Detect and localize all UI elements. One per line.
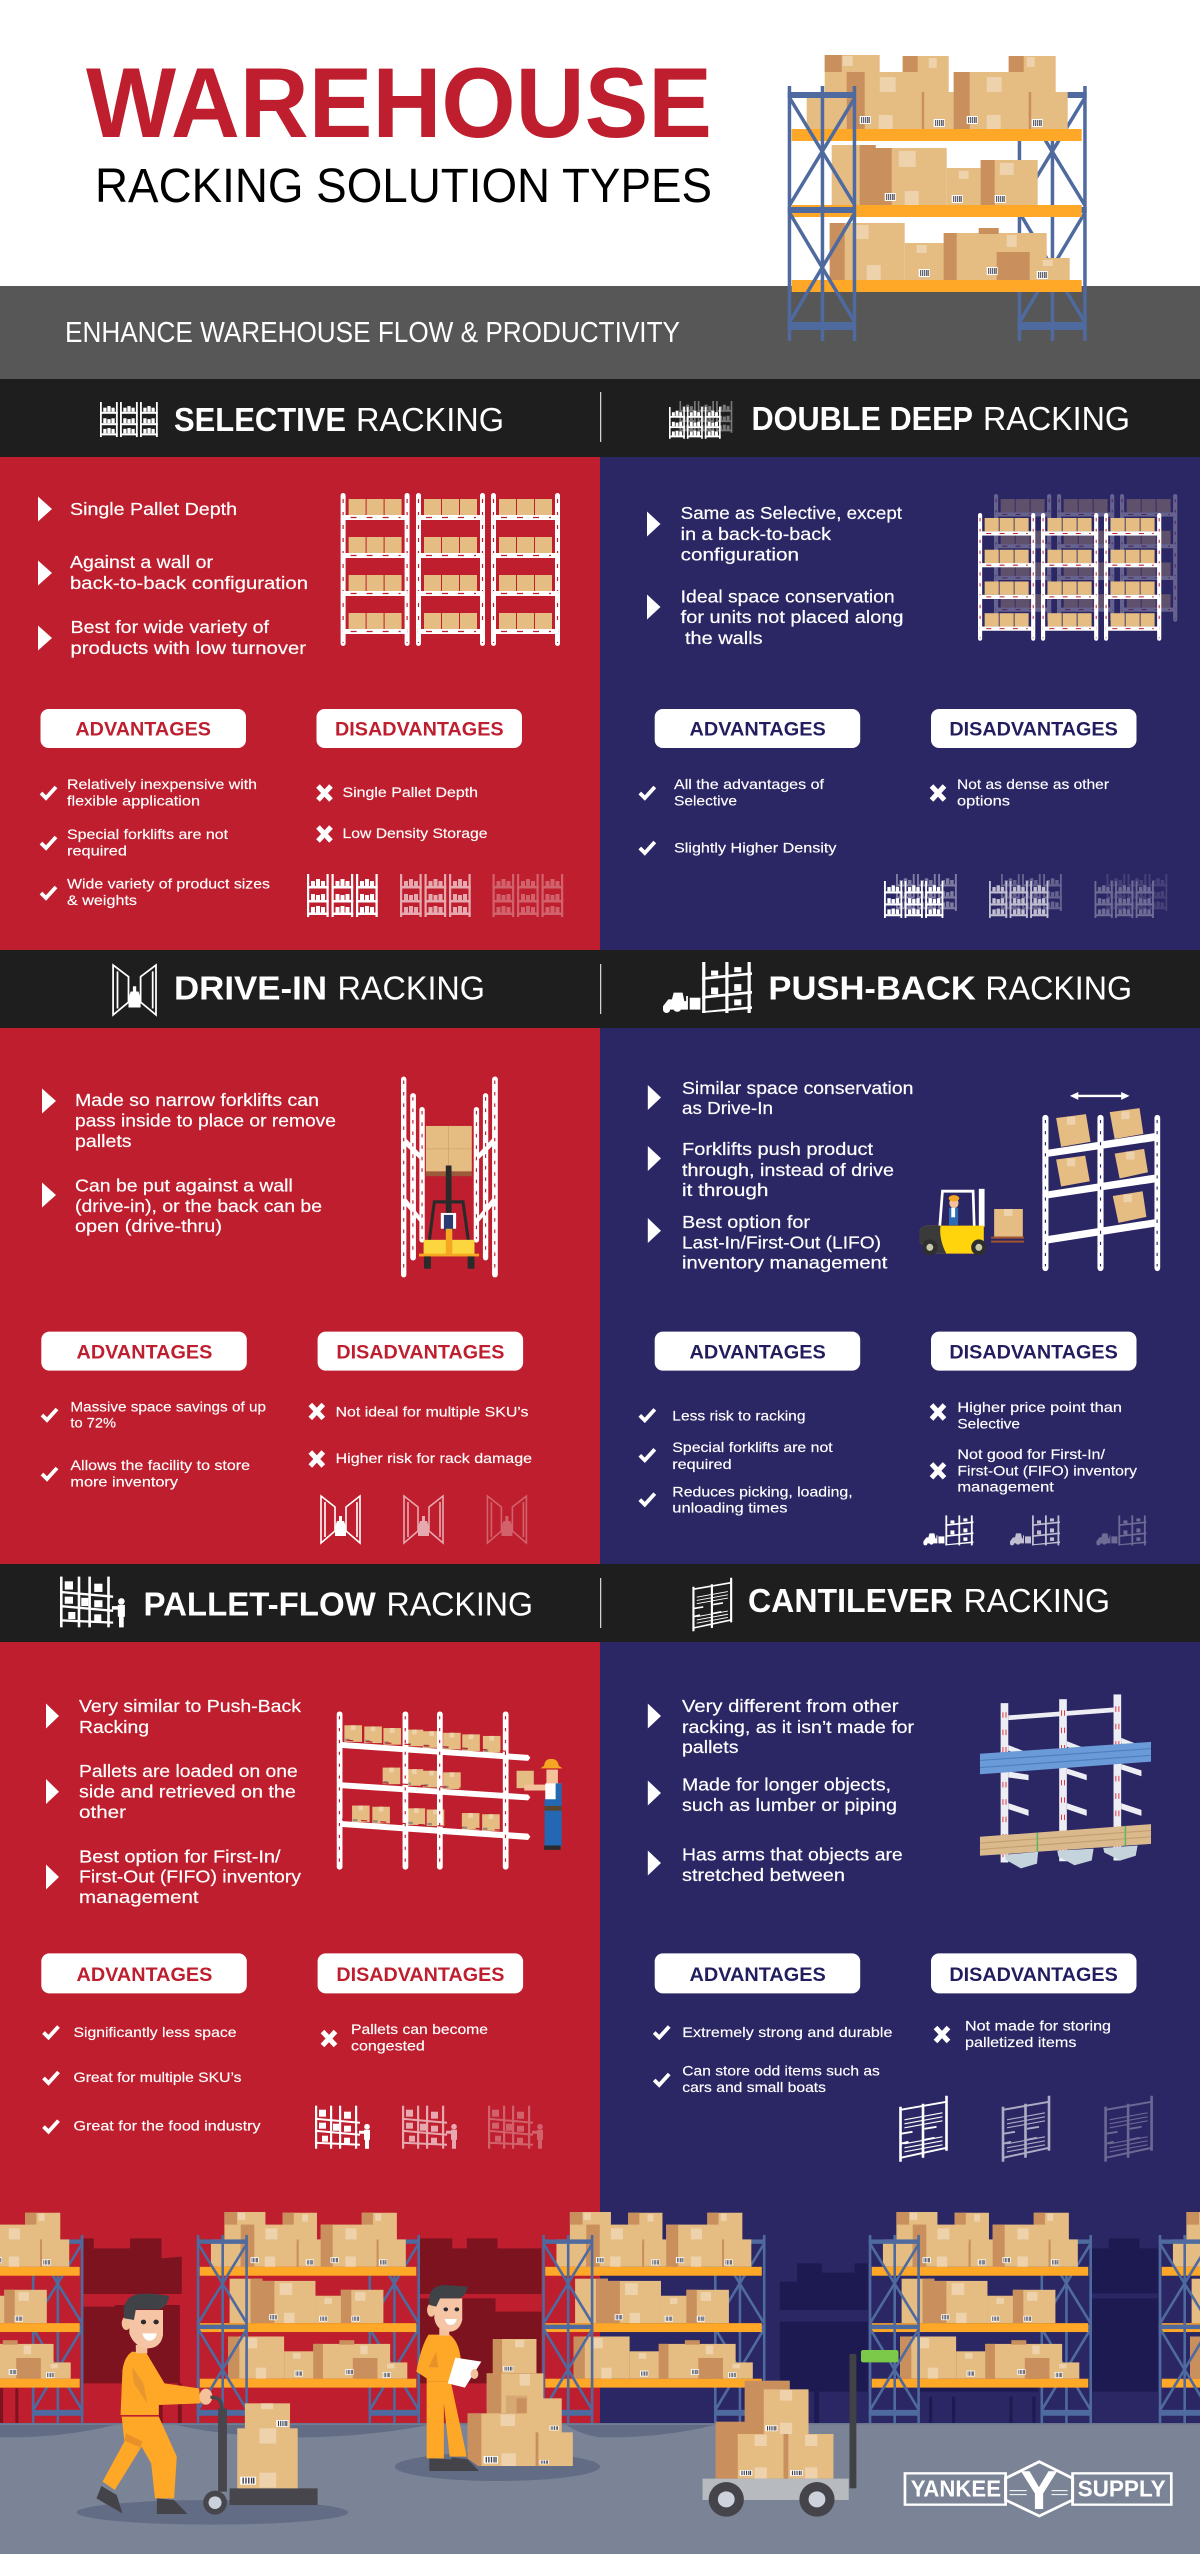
bullet list: double deep: the walls xyxy=(685,628,763,648)
disadvantages list: Selective xyxy=(957,1416,1020,1432)
disadvantages list xyxy=(318,785,488,841)
heading: push-back racking: PUSH-BACK xyxy=(768,970,976,1007)
bullet list: push-back: as Drive-In xyxy=(682,1098,773,1118)
advantages list: All the advantages of xyxy=(674,777,824,792)
icon: double deep xyxy=(669,401,732,439)
icon: pallet-flow xyxy=(60,1577,125,1627)
warehouse floor scene xyxy=(0,2190,1200,2554)
heading band: drive-in and push-back xyxy=(0,950,1200,1028)
advantages button: ADVANTAGES xyxy=(690,1964,826,1986)
heading: pallet-flow racking xyxy=(144,1586,533,1623)
bullet list: cantilever: stretched between xyxy=(682,1865,845,1885)
disadvantages list: Not as dense as other xyxy=(957,777,1110,792)
background silhouettes: left xyxy=(0,2238,541,2423)
disadvantages list: Single Pallet Depth xyxy=(342,785,478,800)
advantages list: Can store odd items such as xyxy=(682,2064,880,2079)
header illustration: warehouse rack with boxes xyxy=(788,55,1087,341)
bullet list: push-back: inventory management xyxy=(682,1253,888,1273)
disadvantages button: DISADVANTAGES xyxy=(949,719,1118,741)
advantages button: ADVANTAGES xyxy=(76,1342,212,1364)
advantages button xyxy=(41,1953,247,1993)
bullet list: pallet-flow: Pallets are loaded on one xyxy=(79,1761,298,1781)
disadvantages button xyxy=(931,709,1136,748)
bullet list: cantilever xyxy=(648,1696,914,1885)
disadvantages list: Not made for storing xyxy=(965,2018,1111,2034)
advantages list: Extremely strong and durable xyxy=(682,2025,892,2040)
advantages list: Massive space savings of up xyxy=(70,1399,266,1414)
bullet list: double deep: Ideal space conservation xyxy=(681,587,895,607)
advantages list: Relatively inexpensive with xyxy=(67,777,257,792)
bullet list: pallet-flow: Very similar to Push-Back xyxy=(79,1696,301,1716)
disadvantages list: congested xyxy=(351,2039,425,2054)
heading: cantilever racking: RACKING xyxy=(964,1583,1110,1620)
panel: drive-in racking xyxy=(0,1028,600,1564)
logo: Yankee Supply: YANKEE xyxy=(911,2476,1001,2502)
disadvantages list xyxy=(322,2022,488,2054)
icon row: drive-in xyxy=(321,1496,526,1543)
panel: push-back racking xyxy=(600,1028,1200,1564)
panel: pallet-flow racking xyxy=(0,1642,600,2192)
advantages list: Great for multiple SKU’s xyxy=(74,2070,242,2085)
tagline band xyxy=(0,286,1200,379)
disadvantages button xyxy=(316,709,522,748)
logo: Yankee Supply xyxy=(905,2459,1171,2521)
bullet list: drive-in: open (drive-thru) xyxy=(75,1216,222,1236)
heading: cantilever racking: CANTILEVER xyxy=(748,1583,953,1620)
bullet list: cantilever: Made for longer objects, xyxy=(682,1774,891,1794)
illustration: drive-in rack with forklift xyxy=(401,1077,498,1277)
advantages button xyxy=(655,1953,860,1993)
disadvantages list: management xyxy=(957,1480,1054,1495)
worker xyxy=(517,1759,562,1850)
advantages list: Selective xyxy=(674,794,737,809)
advantages list xyxy=(41,777,270,908)
bullet list: cantilever: Very different from other xyxy=(682,1696,899,1716)
panel: cantilever racking xyxy=(600,1642,1200,2192)
bullet list: pallet-flow xyxy=(46,1696,301,1907)
heading: push-back racking: RACKING xyxy=(985,970,1132,1007)
icon: push-back xyxy=(663,962,752,1013)
advantages list: cars and small boats xyxy=(682,2080,826,2095)
advantages list xyxy=(640,777,837,856)
hand truck with boxes xyxy=(203,2397,318,2515)
icon row: selective xyxy=(307,874,563,917)
bullet list: selective: Best for wide variety of xyxy=(70,617,269,637)
heading: selective racking: SELECTIVE xyxy=(174,402,346,439)
bullet list: drive-in: pass inside to place or remove xyxy=(75,1111,336,1131)
disadvantages button: DISADVANTAGES xyxy=(335,719,504,741)
advantages list: flexible application xyxy=(67,794,200,809)
lumber stack: blue xyxy=(980,1742,1151,1774)
disadvantages button: DISADVANTAGES xyxy=(336,1342,504,1364)
heading: push-back racking xyxy=(768,970,1132,1007)
lumber stack: tan xyxy=(980,1824,1151,1856)
heading: drive-in racking xyxy=(174,970,485,1007)
bullet list: drive-in: Made so narrow forklifts can xyxy=(75,1090,319,1110)
heading: drive-in racking: RACKING xyxy=(338,970,485,1007)
advantages list: required xyxy=(67,844,127,859)
panel: selective racking xyxy=(0,457,600,950)
advantages list: Less risk to racking xyxy=(672,1408,806,1424)
heading: cantilever racking xyxy=(748,1583,1110,1620)
advantages list: more inventory xyxy=(70,1475,178,1490)
bullet list: cantilever: pallets xyxy=(682,1737,739,1757)
advantages list: required xyxy=(672,1457,732,1472)
disadvantages button: DISADVANTAGES xyxy=(949,1964,1118,1986)
advantages list: Reduces picking, loading, xyxy=(672,1484,853,1500)
icon row: pallet-flow xyxy=(315,2106,543,2149)
bullet list: drive-in: (drive-in), or the back can be xyxy=(75,1196,322,1216)
forklift xyxy=(920,1189,1024,1255)
bullet list: cantilever: Has arms that objects are xyxy=(682,1844,903,1864)
bullet list: double deep: for units not placed along xyxy=(681,607,904,627)
bullet list: push-back: through, instead of drive xyxy=(682,1160,894,1180)
disadvantages list: options xyxy=(957,794,1010,809)
illustration: selective rack xyxy=(341,493,560,646)
panel: double deep racking xyxy=(600,457,1200,950)
advantages button xyxy=(40,709,246,748)
bullet list: pallet-flow: Best option for First-In/ xyxy=(79,1846,281,1866)
header background xyxy=(0,0,1200,286)
heading: double deep racking xyxy=(752,401,1130,438)
icon row: cantilever xyxy=(900,2096,1152,2162)
bullet list: selective: Against a wall or xyxy=(70,552,213,572)
subtitle: racking solution types: RACKING SOLUTION TYPES xyxy=(95,160,712,213)
disadvantages button xyxy=(318,1953,523,1993)
bullet list: double deep: configuration xyxy=(681,545,799,565)
logo: Yankee Supply: Y xyxy=(1020,2459,1058,2521)
heading: double deep racking: DOUBLE DEEP xyxy=(752,401,973,438)
storage racks xyxy=(0,2212,1200,2424)
bullet list: double deep: in a back-to-back xyxy=(681,524,831,544)
advantages list: Allows the facility to store xyxy=(70,1458,250,1473)
advantages list xyxy=(654,2025,892,2095)
background silhouettes: right xyxy=(780,2238,1158,2423)
illustration: double deep rack xyxy=(978,494,1177,641)
bullet list: selective: Single Pallet Depth xyxy=(70,499,237,519)
bullet list: selective xyxy=(38,496,308,658)
disadvantages button: DISADVANTAGES xyxy=(336,1964,504,1986)
disadvantages list xyxy=(936,2018,1111,2050)
disadvantages list: palletized items xyxy=(965,2035,1077,2050)
bullet list: push-back: Last-In/First-Out (LIFO) xyxy=(682,1232,881,1252)
icon: drive-in xyxy=(113,965,156,1015)
advantages button: ADVANTAGES xyxy=(75,719,211,741)
bullet list: drive-in: pallets xyxy=(75,1131,132,1151)
box stack xyxy=(468,2339,573,2466)
advantages list xyxy=(42,1399,266,1490)
illustration: push-back rack with forklift xyxy=(920,1092,1160,1271)
bullet list: pallet-flow: Racking xyxy=(79,1717,149,1737)
icon: selective xyxy=(100,402,158,437)
disadvantages list: Not good for First-In/ xyxy=(957,1447,1105,1462)
advantages list: unloading times xyxy=(672,1500,788,1515)
bullet list: cantilever: racking, as it isn’t made for xyxy=(682,1717,914,1737)
workers, carts and shadows xyxy=(0,2285,600,2525)
icon row: push-back xyxy=(923,1515,1146,1545)
advantages button: ADVANTAGES xyxy=(76,1964,212,1986)
bullet list: selective: products with low turnover xyxy=(70,638,306,658)
illustration: pallet-flow rack with worker xyxy=(337,1711,562,1870)
bullet list: pallet-flow: First-Out (FIFO) inventory xyxy=(79,1867,301,1887)
bullet list: push-back xyxy=(648,1078,913,1273)
mounting feet xyxy=(1006,1845,1138,1868)
bullet list: push-back: Similar space conservation xyxy=(682,1078,913,1098)
advantages button: ADVANTAGES xyxy=(690,1342,826,1364)
disadvantages list xyxy=(932,1400,1137,1495)
advantages button xyxy=(655,709,860,748)
advantages list: Special forklifts are not xyxy=(67,827,228,842)
icon: cantilever xyxy=(693,1578,731,1631)
advantages list: Great for the food industry xyxy=(74,2119,261,2134)
advantages list: Wide variety of product sizes xyxy=(67,877,270,892)
heading band: selective and double deep xyxy=(0,379,1200,457)
heading: drive-in racking: DRIVE-IN xyxy=(174,970,327,1007)
heading: pallet-flow racking: PALLET-FLOW xyxy=(144,1586,376,1623)
heading: double deep racking: RACKING xyxy=(983,401,1130,438)
arrow: push direction xyxy=(1070,1092,1130,1100)
bullet list: drive-in xyxy=(42,1088,336,1236)
cart with boxes xyxy=(600,2350,898,2517)
bullet list: pallet-flow: management xyxy=(79,1887,199,1907)
bullet list: pallet-flow: side and retrieved on the xyxy=(79,1782,296,1802)
advantages list xyxy=(44,2025,261,2134)
tagline: ENHANCE WAREHOUSE FLOW & PRODUCTIVITY xyxy=(65,317,680,349)
bullet list: selective: back-to-back configuration xyxy=(70,573,308,593)
bullet list: drive-in: Can be put against a wall xyxy=(75,1176,293,1196)
bullet list: double deep: Same as Selective, except xyxy=(681,503,902,523)
advantages button: ADVANTAGES xyxy=(690,719,826,741)
advantages list xyxy=(640,1408,853,1515)
disadvantages button xyxy=(931,1332,1136,1371)
bullet list: push-back: it through xyxy=(682,1180,768,1200)
advantages list: Slightly Higher Density xyxy=(674,841,837,856)
heading: selective racking: RACKING xyxy=(356,402,504,439)
disadvantages list: Not ideal for multiple SKU’s xyxy=(336,1405,529,1420)
bullet list: double deep xyxy=(647,503,904,648)
advantages list: Significantly less space xyxy=(74,2025,236,2040)
advantages list: Special forklifts are not xyxy=(672,1440,833,1455)
disadvantages list xyxy=(932,777,1110,809)
disadvantages list: Pallets can become xyxy=(351,2022,488,2037)
illustration: cantilever rack with lumber xyxy=(980,1694,1151,1868)
advantages button xyxy=(655,1332,860,1371)
heading: pallet-flow racking: RACKING xyxy=(386,1586,533,1623)
logo: Yankee Supply: SUPPLY xyxy=(1078,2476,1166,2502)
disadvantages button: DISADVANTAGES xyxy=(949,1342,1118,1364)
disadvantages list xyxy=(310,1404,532,1466)
worker pushing hand truck xyxy=(96,2294,212,2514)
disadvantages list: Low Density Storage xyxy=(342,826,488,841)
disadvantages list: Higher risk for rack damage xyxy=(336,1451,532,1466)
icon row: double deep xyxy=(884,874,1167,918)
disadvantages list: Higher price point than xyxy=(957,1400,1122,1415)
worker with clipboard xyxy=(416,2285,481,2471)
heading band: pallet-flow and cantilever xyxy=(0,1564,1200,1642)
advantages button xyxy=(41,1332,247,1371)
advantages list: & weights xyxy=(67,893,137,908)
disadvantages list: First-Out (FIFO) inventory xyxy=(957,1464,1137,1478)
heading: selective racking xyxy=(174,402,504,439)
disadvantages button xyxy=(318,1332,523,1371)
disadvantages button xyxy=(931,1953,1136,1993)
floor xyxy=(0,2423,1200,2554)
advantages list: to 72% xyxy=(70,1416,116,1431)
bullet list: push-back: Best option for xyxy=(682,1212,810,1232)
bullet list: pallet-flow: other xyxy=(79,1802,126,1822)
bullet list: push-back: Forklifts push product xyxy=(682,1139,873,1159)
title: WAREHOUSE: WAREHOUSE xyxy=(86,47,712,158)
bullet list: cantilever: such as lumber or piping xyxy=(682,1795,897,1815)
